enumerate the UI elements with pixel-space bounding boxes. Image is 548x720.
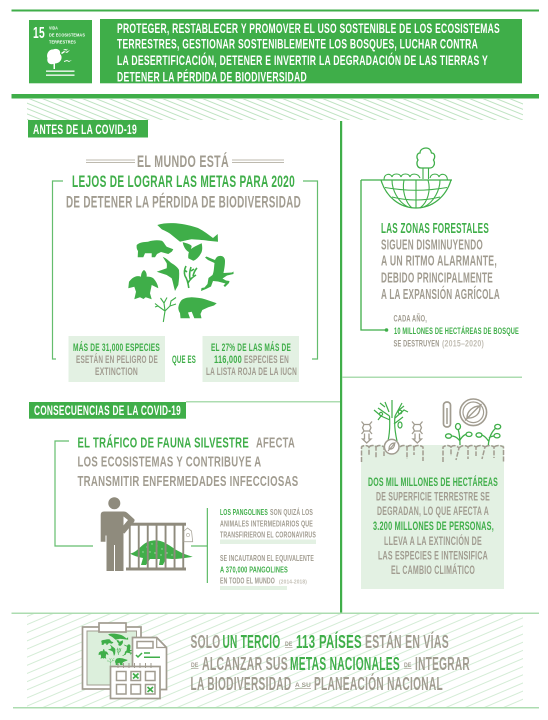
heading: goals — [66, 152, 301, 212]
icon: person with caged pangolin — [101, 497, 193, 571]
panel: national plans footer — [12, 612, 539, 708]
text: degraded land: LLEVA A LA EXTINCIÓN DE — [384, 533, 482, 548]
text: hectares per year: (2015–2020) — [442, 338, 484, 350]
soil — [362, 446, 423, 462]
icon: degraded tree, chemicals, climate and sprouts — [362, 399, 504, 462]
thermometer — [444, 402, 451, 427]
stat box: red list: EL 27% DE LAS MÁS DE — [211, 341, 291, 354]
text: one third of countries: METAS NACIONALES — [290, 654, 400, 674]
rhino — [137, 240, 173, 257]
text: one third of countries: SOLO — [190, 632, 220, 652]
text: one third of countries: UN TERCIO — [222, 632, 280, 652]
tree — [374, 400, 408, 441]
stat box: endangered species — [68, 336, 165, 382]
heading: wildlife trafficking: EL TRÁFICO DE FAUNA SILVESTRE — [78, 434, 249, 452]
heading: wildlife trafficking: TRANSMITIR ENFERMEDADES INFECCIOSAS — [78, 473, 298, 490]
stat box: red list: 116,000 — [214, 354, 242, 366]
bear — [178, 297, 217, 318]
heading: goals: LEJOS DE LOGRAR LAS METAS PARA 2020 — [72, 173, 295, 191]
SDG 15 badge: TERRESTRES — [49, 40, 77, 46]
heading: wildlife trafficking: AFECTA — [256, 434, 295, 452]
heading: goals: EL MUNDO ESTÁ — [137, 152, 229, 171]
text: hectares per year — [394, 314, 519, 350]
cage — [126, 523, 186, 570]
text: one third of countries: LA BIODIVERSIDAD — [190, 674, 292, 694]
pangolin — [130, 540, 193, 565]
connector text: QUE ES — [172, 354, 196, 366]
text: one third of countries: DE — [191, 662, 199, 669]
SDG 15 badge: DE ECOSISTEMAS — [49, 32, 86, 38]
leaves — [183, 242, 202, 261]
text: one third of countries — [190, 631, 470, 694]
stat box: endangered species: EXTINCTION — [95, 366, 138, 378]
text: pangolins: LOS PANGOLINES — [220, 507, 268, 517]
column and row dividers — [186, 121, 522, 613]
SDG 15 badge: 15 — [33, 25, 45, 42]
text: seizures: EN TODO EL MUNDO — [220, 576, 275, 586]
text: seizures — [220, 553, 314, 590]
SDG 15 badge: VIDA — [49, 26, 58, 32]
stat box: red list — [202, 336, 299, 382]
section label: consecuencias — [29, 402, 186, 419]
text: pangolins: SON QUIZÁ LOS — [270, 507, 313, 517]
tag — [184, 528, 193, 542]
section label: consecuencias: CONSECUENCIAS DE LA COVID-19 — [34, 403, 181, 418]
person — [101, 497, 135, 571]
text: forest decline — [381, 221, 500, 303]
banner: goal statement — [100, 19, 522, 84]
text: one third of countries: A SU — [295, 682, 311, 689]
SDG 15 badge — [29, 20, 92, 83]
seaweed — [184, 266, 197, 288]
text: pangolins: TRANSFIRIERON EL CORONAVIRUS — [220, 530, 316, 540]
text: pangolins — [220, 507, 316, 544]
text: one third of countries: PLANEACIÓN NACIONAL — [314, 673, 443, 694]
section label: antes — [28, 120, 148, 138]
text: one third of countries: ESTÁN EN VÍAS — [365, 631, 449, 652]
text: one third of countries: ALCANZAR SUS — [202, 654, 288, 674]
heading: wildlife trafficking — [78, 434, 298, 490]
stat box: endangered species: MÁS DE 31,000 ESPECIES — [73, 341, 160, 354]
icon: circle of species — [128, 223, 234, 322]
icon: tree with birds — [46, 48, 74, 76]
text: degraded land: EL CAMBIO CLIMÁTICO — [391, 562, 475, 577]
top rule — [12, 10, 539, 12]
text: pangolins: ANIMALES INTERMEDIARIOS QUE — [220, 518, 313, 528]
stat box: red list: LA LISTA ROJA DE LA IUCN — [206, 366, 297, 378]
text: seizures: (2014-2018) — [279, 580, 307, 586]
prohibited leaf — [460, 399, 487, 426]
section label: antes: ANTES DE LA COVID-19 — [33, 122, 137, 137]
swallow — [157, 257, 179, 291]
text: hectares per year: SE DESTRUYEN — [394, 338, 440, 350]
heading: wildlife trafficking: LOS ECOSISTEMAS Y CONTRIBUYE A — [78, 454, 262, 470]
icon: tree on half globe — [361, 148, 452, 330]
text: seizures: SE INCAUTARON EL EQUIVALENTE — [220, 553, 314, 563]
sprouts — [446, 424, 501, 445]
text: one third of countries: DE — [285, 641, 293, 648]
text: degraded land — [368, 474, 498, 577]
stat box: endangered species: ESETÁN EN PELIGRO DE — [76, 353, 158, 366]
frog — [201, 256, 234, 291]
panel: forest zones — [361, 148, 519, 350]
molecules — [362, 422, 372, 443]
text: hectares per year: CADA AÑO, — [394, 314, 427, 324]
text: seizures: A 370,000 PANGOLINES — [220, 564, 288, 574]
panel: wildlife trafficking — [55, 434, 316, 590]
panel: biodiversity goals — [52, 152, 318, 382]
stat box: red list: ESPECIES EN — [244, 354, 289, 366]
whale — [157, 223, 218, 242]
icon: clipboard, document and calendar — [82, 623, 166, 698]
coral plant — [155, 298, 176, 322]
turtle — [128, 270, 158, 299]
text: one third of countries: DE — [404, 662, 412, 669]
timeline dot — [385, 328, 388, 332]
text: one third of countries: INTEGRAR — [415, 654, 470, 674]
panel: land degradation — [361, 399, 504, 589]
banner: goal statement: DETENER LA PÉRDIDA DE BIODIVERSIDAD — [117, 68, 307, 84]
text: one third of countries: 113 PAÍSES — [296, 631, 362, 652]
heading: goals: DE DETENER LA PÉRDIDA DE BIODIVERSIDAD — [66, 192, 301, 212]
